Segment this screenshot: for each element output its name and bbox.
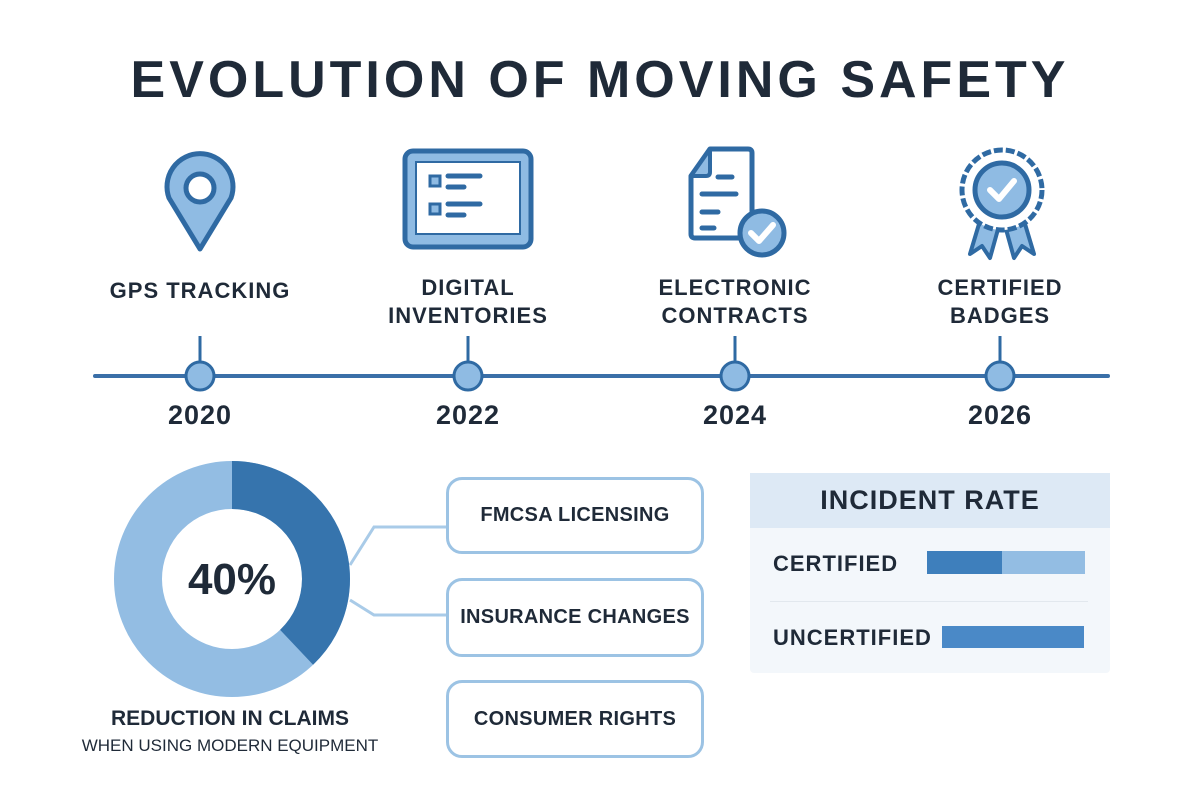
box: consumer rights: CONSUMER RIGHTS [474,708,676,730]
panel header: INCIDENT RATE [820,485,1040,515]
label: gps tracking: GPS TRACKING [110,278,290,303]
box: insurance changes [446,578,704,657]
years: 2020 [168,400,232,430]
years: 2026 [968,400,1032,430]
icon: certified badge [960,148,1044,260]
box: fmcsa licensing [446,477,704,554]
label: certified badges [937,275,1063,328]
years: 2022 [436,400,500,430]
label: digital inventories [388,275,548,328]
years: 2024 [703,400,767,430]
donut chart with connectors: 40% [188,555,276,604]
uncertified bar [942,626,1084,648]
box: insurance changes: INSURANCE CHANGES [460,606,690,628]
label: certified badges: BADGES [950,303,1050,328]
box: fmcsa licensing: FMCSA LICENSING [480,504,670,526]
label: digital inventories: INVENTORIES [388,303,548,328]
icon: electronic contract [688,146,786,258]
certified row: CERTIFIED [773,551,898,576]
title: EVOLUTION OF MOVING SAFETY [131,51,1069,109]
certified bar [927,551,1085,574]
label: electronic contracts: ELECTRONIC [658,275,812,300]
donut caption: WHEN USING MODERN EQUIPMENT [82,736,378,755]
years [168,400,1032,430]
donut caption [82,707,378,755]
uncertified row: UNCERTIFIED [773,625,932,650]
box: consumer rights [446,680,704,758]
panel: incident rate [750,473,1110,673]
label: digital inventories: DIGITAL [421,275,515,300]
icon: digital inventory [402,148,534,250]
label: certified badges: CERTIFIED [937,275,1063,300]
donut caption: REDUCTION IN CLAIMS [111,707,349,730]
label: electronic contracts: CONTRACTS [661,303,809,328]
donut chart with connectors [114,461,446,697]
icon: gps pin [164,151,236,252]
timeline [93,336,1110,392]
label: electronic contracts [658,275,812,328]
panel header [750,473,1110,528]
